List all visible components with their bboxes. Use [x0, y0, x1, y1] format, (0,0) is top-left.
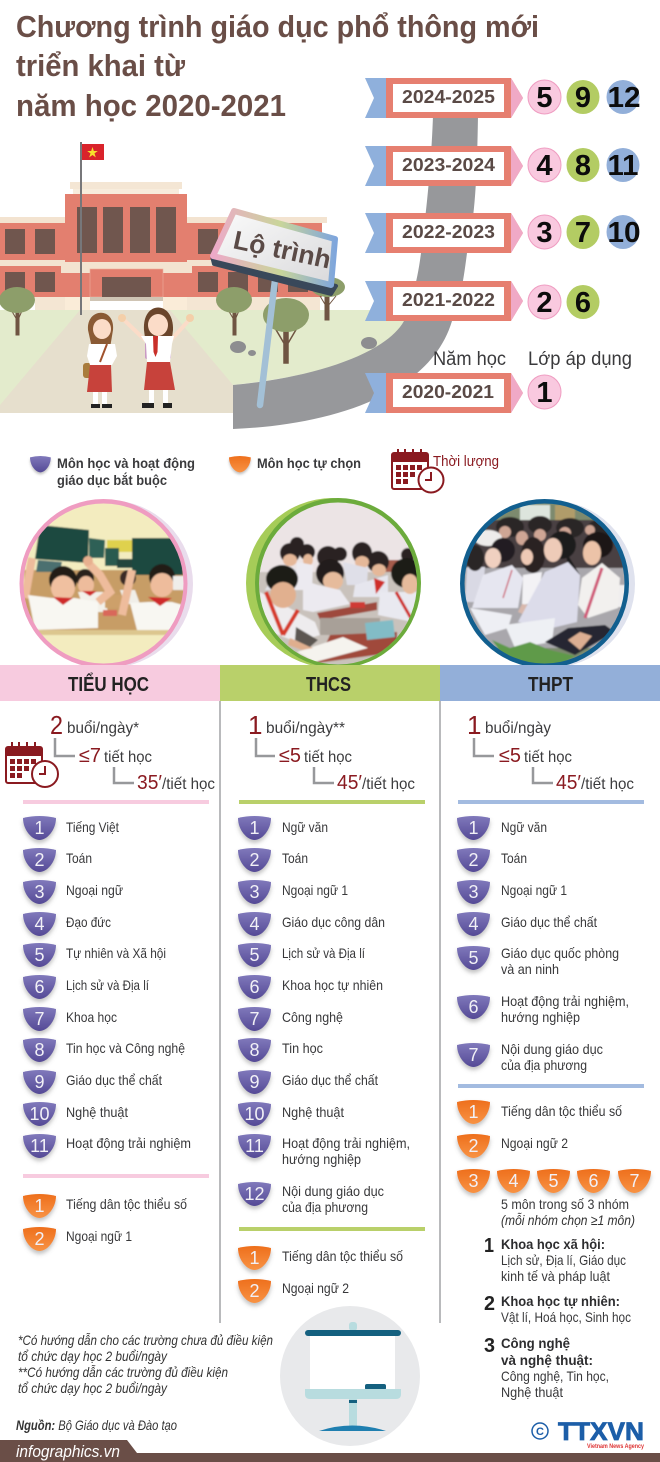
subject list: THPT elective: 2 [468, 1136, 479, 1156]
subject list: TIỂU HỌC compulsory: 5 [34, 945, 45, 965]
subject list: THPT compulsory: Hoạt động trải nghiệm, [501, 993, 629, 1009]
timeline column labels [433, 349, 632, 370]
timeline: 2021-2022 [365, 281, 600, 321]
subject list: THCS compulsory: 8 [249, 1040, 260, 1060]
schedule: THPT: /tiết học [581, 776, 634, 793]
logo: TTXVN: Vietnam News Agency [587, 1444, 645, 1450]
subject list: THPT elective: 5 [548, 1171, 559, 1191]
timeline: 2021-2022: 6 [575, 287, 591, 319]
source: Nguồn: Bộ Giáo dục và Đào tạo [16, 1417, 177, 1433]
footer bar [0, 1440, 660, 1462]
header: THCS [220, 665, 440, 701]
schedule: THCS: ≤5 [279, 745, 301, 767]
subject list: TIỂU HỌC compulsory: Khoa học [66, 1009, 117, 1025]
subject list: TIỂU HỌC compulsory: Giáo dục thể chất [66, 1072, 162, 1088]
title: Chương trình giáo dục phổ thông mới [16, 9, 539, 44]
rocks [230, 337, 385, 356]
subject list: THPT compulsory: Ngoại ngữ 1 [501, 882, 567, 898]
schedule: TIỂU HỌC [6, 710, 215, 794]
schedule: TIỂU HỌC: /tiết học [162, 776, 215, 793]
timeline: 2023-2024: 4 [536, 150, 553, 182]
students [83, 308, 194, 408]
subject list: THCS compulsory: Giáo dục công dân [282, 914, 385, 930]
subject list: TIỂU HỌC elective: 2 [34, 1229, 45, 1249]
schedule: THCS: 45′ [337, 772, 362, 794]
timeline: 2022-2023: 10 [608, 217, 640, 249]
subject list: THCS compulsory: 12 [244, 1184, 265, 1204]
subject list: THPT elective: 6 [588, 1171, 599, 1191]
subject list: THPT compulsory: 3 [468, 882, 479, 902]
subject list: THPT compulsory: và an ninh [501, 961, 559, 977]
elective groups: Công nghệ [501, 1335, 570, 1351]
legend: elective [229, 455, 361, 472]
timeline: 2022-2023: 2022-2023 [402, 222, 495, 242]
timeline column labels: Năm học [433, 349, 506, 370]
footnotes: **Có hướng dẫn các trường đủ điều kiện [18, 1364, 228, 1380]
timeline: 2022-2023 [365, 213, 640, 253]
subject list: THPT compulsory: Giáo dục quốc phòng [501, 945, 619, 961]
subject list: TIỂU HỌC compulsory: Tin học và Công nghệ [66, 1040, 185, 1056]
subject list: THPT elective: 4 [508, 1171, 519, 1191]
timeline: 2022-2023: 3 [536, 217, 553, 249]
subject list: THPT compulsory: 2 [468, 850, 479, 870]
footnotes: *Có hướng dẫn cho các trường chưa đủ điều kiện [18, 1332, 273, 1348]
schedule: TIỂU HỌC: 35′ [137, 772, 162, 794]
schedule: THCS: buổi/ngày** [266, 719, 345, 737]
school building [0, 182, 327, 310]
elective groups: 1 [484, 1235, 494, 1257]
subject list: THPT compulsory: 6 [468, 997, 479, 1017]
school path [0, 310, 233, 413]
subject list: THCS compulsory: Giáo dục thể chất [282, 1072, 378, 1088]
road [233, 116, 478, 429]
footer bar: infographics.vn [16, 1442, 120, 1461]
subject list: TIỂU HỌC elective: Tiếng dân tộc thiểu số [66, 1196, 187, 1212]
timeline: 2023-2024: 11 [608, 150, 638, 182]
schedule: THPT [467, 710, 634, 794]
schedule: THCS [248, 710, 415, 794]
subject list: TIỂU HỌC compulsory: 8 [34, 1040, 45, 1060]
timeline: 2023-2024: 2023-2024 [402, 155, 495, 175]
student right [118, 308, 194, 408]
subject list: TIỂU HỌC elective: Ngoại ngữ 1 [66, 1228, 132, 1244]
subject list: THCS elective: Ngoại ngữ 2 [282, 1280, 349, 1296]
subject list: THCS compulsory: Hoạt động trải nghiệm, [282, 1135, 410, 1151]
timeline: 2024-2025: 9 [575, 82, 591, 114]
illustration: school scene [0, 142, 412, 413]
subject list: THCS compulsory: 1 [249, 818, 260, 838]
subject list: THPT elective: 1 [468, 1102, 479, 1122]
subject list: THCS elective [238, 1246, 403, 1303]
logo: TTXVN: TTXVN [558, 1418, 644, 1446]
subject list: THCS compulsory: 10 [244, 1104, 265, 1124]
subject list: TIỂU HỌC compulsory: 9 [34, 1072, 45, 1092]
subject list: THCS compulsory: Nội dung giáo dục [282, 1183, 384, 1199]
schedule: TIỂU HỌC: tiết học [104, 749, 152, 766]
icon: whiteboard [280, 1306, 420, 1446]
subject list: THCS compulsory: 4 [249, 914, 260, 934]
subject list: THCS elective: 1 [249, 1248, 260, 1268]
icon: calendar clock [6, 742, 58, 787]
timeline: 2020-2021: 2020-2021 [402, 382, 494, 402]
subject list: THPT compulsory: Nội dung giáo dục [501, 1041, 603, 1057]
legend [30, 449, 499, 492]
elective groups [484, 1235, 631, 1400]
timeline: 2021-2022: 2021-2022 [402, 290, 495, 310]
schedule: THCS: tiết học [304, 749, 352, 766]
header: THPT: THPT [528, 674, 573, 696]
student left [83, 313, 117, 408]
schedule: THPT: 1 [467, 710, 481, 740]
subject list: TIỂU HỌC compulsory: 10 [29, 1104, 50, 1124]
timeline: 2023-2024: 8 [575, 150, 591, 182]
legend: compulsory [30, 455, 195, 488]
subject list: THPT elective: Ngoại ngữ 2 [501, 1135, 568, 1151]
schedule: THCS: 1 [248, 710, 262, 740]
subject list: THPT elective: 7 [629, 1171, 640, 1191]
subject list: TIỂU HỌC compulsory: 2 [34, 850, 45, 870]
trees [0, 277, 345, 363]
elective groups: Nghệ thuật [501, 1384, 563, 1400]
subject list: THCS compulsory: 6 [249, 977, 260, 997]
subject list: THPT compulsory: Toán [501, 850, 527, 866]
schedule: THCS: /tiết học [362, 776, 415, 793]
title: triển khai từ [16, 48, 186, 83]
subject list: THCS compulsory: 5 [249, 945, 260, 965]
subject list: TIỂU HỌC compulsory: Lịch sử và Địa lí [66, 977, 149, 993]
subject list: THPT compulsory: 5 [468, 948, 479, 968]
subject list: TIỂU HỌC compulsory: 11 [30, 1136, 49, 1156]
subject list: TIỂU HỌC compulsory: 1 [34, 818, 45, 838]
timeline: 2020-2021: 1 [536, 377, 553, 409]
subject list: THCS compulsory: 3 [249, 882, 260, 902]
subject list: THPT compulsory: của địa phương [501, 1057, 587, 1073]
elective groups: 2 [484, 1293, 495, 1315]
timeline: 2022-2023: 7 [575, 217, 591, 249]
subject list: THCS compulsory: 11 [245, 1136, 264, 1156]
sign: Lộ trình: Lộ trình [231, 225, 334, 274]
subject list: THCS compulsory: Lịch sử và Địa lí [282, 945, 365, 961]
elective groups: Khoa học xã hội: [501, 1236, 605, 1252]
legend: compulsory: Môn học và hoạt động [57, 455, 195, 471]
title [16, 9, 539, 123]
subject list: TIỂU HỌC compulsory: 6 [34, 977, 45, 997]
schedule: TIỂU HỌC: buổi/ngày* [67, 719, 139, 737]
schedule: THPT: buổi/ngày [485, 719, 551, 737]
subject list: THCS compulsory: Ngữ văn [282, 819, 328, 835]
elective groups: Khoa học tự nhiên: [501, 1293, 620, 1309]
subject list: TIỂU HỌC compulsory: Ngoại ngữ [66, 882, 123, 898]
subject list: THCS compulsory: Khoa học tự nhiên [282, 977, 383, 993]
subject list: THPT compulsory: Giáo dục thể chất [501, 914, 597, 930]
elective groups: 3 [484, 1335, 495, 1357]
subject list: TIỂU HỌC compulsory: Toán [66, 850, 92, 866]
subject list: THCS compulsory: Toán [282, 850, 308, 866]
subject list: THCS compulsory: của địa phương [282, 1199, 368, 1215]
legend: elective: Môn học tự chọn [257, 455, 361, 471]
subject list: THCS compulsory: 2 [249, 850, 260, 870]
timeline column labels: Lớp áp dụng [528, 349, 632, 370]
header: THPT [440, 665, 660, 701]
schedule: TIỂU HỌC: 2 [50, 710, 63, 740]
photo: primary school [20, 499, 193, 670]
elective groups: kinh tế và pháp luật [501, 1268, 610, 1284]
legend: duration [392, 449, 499, 492]
subject list: THPT elective: Tiếng dân tộc thiểu số [501, 1103, 622, 1119]
school grounds [0, 310, 412, 413]
timeline: 2020-2021 [365, 373, 561, 413]
photo: upper secondary school [460, 498, 635, 668]
schedule: THPT: tiết học [524, 749, 572, 766]
header: TIỂU HỌC: TIỂU HỌC [68, 673, 149, 696]
subject list: THCS elective: Tiếng dân tộc thiểu số [282, 1248, 403, 1264]
photo: lower secondary school [246, 498, 425, 668]
schedule: THPT: ≤5 [499, 745, 521, 767]
subject list: TIỂU HỌC compulsory: 7 [34, 1009, 45, 1029]
footnotes: tổ chức dạy học 2 buổi/ngày [18, 1380, 168, 1396]
logo: TTXVN: C [536, 1426, 544, 1438]
subject list: TIỂU HỌC compulsory: 4 [34, 914, 45, 934]
subject list: TIỂU HỌC compulsory: Tự nhiên và Xã hội [66, 945, 166, 961]
footnotes [18, 1332, 273, 1396]
subject list: THCS compulsory: Nghệ thuật [282, 1104, 344, 1120]
title: năm học 2020-2021 [16, 88, 286, 123]
header: THCS: THCS [306, 674, 351, 696]
timeline: 2024-2025: 12 [608, 82, 640, 114]
subject list: TIỂU HỌC compulsory: Nghệ thuật [66, 1104, 128, 1120]
subject list: TIỂU HỌC compulsory [23, 816, 191, 1158]
timeline: 2023-2024 [365, 146, 640, 186]
subject list: THPT compulsory: 7 [468, 1045, 479, 1065]
subject list: THPT compulsory: 1 [468, 818, 479, 838]
subject list: THPT elective [457, 1100, 651, 1228]
timeline: 2024-2025: 2024-2025 [402, 87, 495, 107]
subject list: THCS compulsory: 7 [249, 1009, 260, 1029]
schedule: THPT: 45′ [556, 772, 581, 794]
subject list: TIỂU HỌC elective [23, 1194, 187, 1251]
subject list: THCS compulsory: Công nghệ [282, 1009, 343, 1025]
subject list: THCS compulsory [238, 816, 410, 1215]
subject list: THCS compulsory: Tin học [282, 1040, 323, 1056]
timeline: 2024-2025: 5 [536, 82, 553, 114]
subject list: TIỂU HỌC compulsory: Đạo đức [66, 914, 111, 930]
subject list: THPT compulsory: hướng nghiệp [501, 1009, 580, 1025]
subject list: TIỂU HỌC compulsory: 3 [34, 882, 45, 902]
subject list: TIỂU HỌC elective: 1 [34, 1196, 45, 1216]
subject list: THPT elective: (mỗi nhóm chọn ≥1 môn) [501, 1212, 635, 1228]
legend: compulsory: giáo dục bắt buộc [57, 471, 167, 488]
logo: TTXVN [532, 1418, 645, 1450]
subject list: THCS compulsory: 9 [249, 1072, 260, 1092]
subject list: THCS compulsory: hướng nghiệp [282, 1151, 361, 1167]
icon: flag [80, 142, 104, 315]
subject list: TIỂU HỌC compulsory: Tiếng Việt [66, 819, 119, 835]
sign: Lộ trình [212, 211, 336, 405]
elective groups: Lịch sử, Địa lí, Giáo dục [501, 1252, 626, 1268]
subject list: TIỂU HỌC compulsory: Hoạt động trải nghiệm [66, 1135, 191, 1151]
subject list: THPT compulsory [457, 816, 629, 1073]
elective groups: Vật lí, Hoá học, Sinh học [501, 1309, 631, 1325]
elective groups: Công nghệ, Tin học, [501, 1368, 609, 1384]
subject list: THPT compulsory: Ngữ văn [501, 819, 547, 835]
elective groups: và nghệ thuật: [501, 1352, 593, 1368]
schedule: TIỂU HỌC: ≤7 [79, 745, 101, 767]
legend: duration: Thời lượng [433, 454, 499, 470]
timeline: 2024-2025 [365, 78, 640, 118]
subject list: THPT elective: 5 môn trong số 3 nhóm [501, 1196, 629, 1212]
footnotes: tổ chức dạy học 2 buổi/ngày [18, 1348, 168, 1364]
timeline: 2021-2022: 2 [536, 287, 553, 319]
subject list: THPT elective: 3 [468, 1171, 479, 1191]
subject list: THCS compulsory: Ngoại ngữ 1 [282, 882, 348, 898]
subject list: THPT compulsory: 4 [468, 914, 479, 934]
subject list: THCS elective: 2 [249, 1281, 260, 1301]
header: TIỂU HỌC [0, 665, 220, 701]
